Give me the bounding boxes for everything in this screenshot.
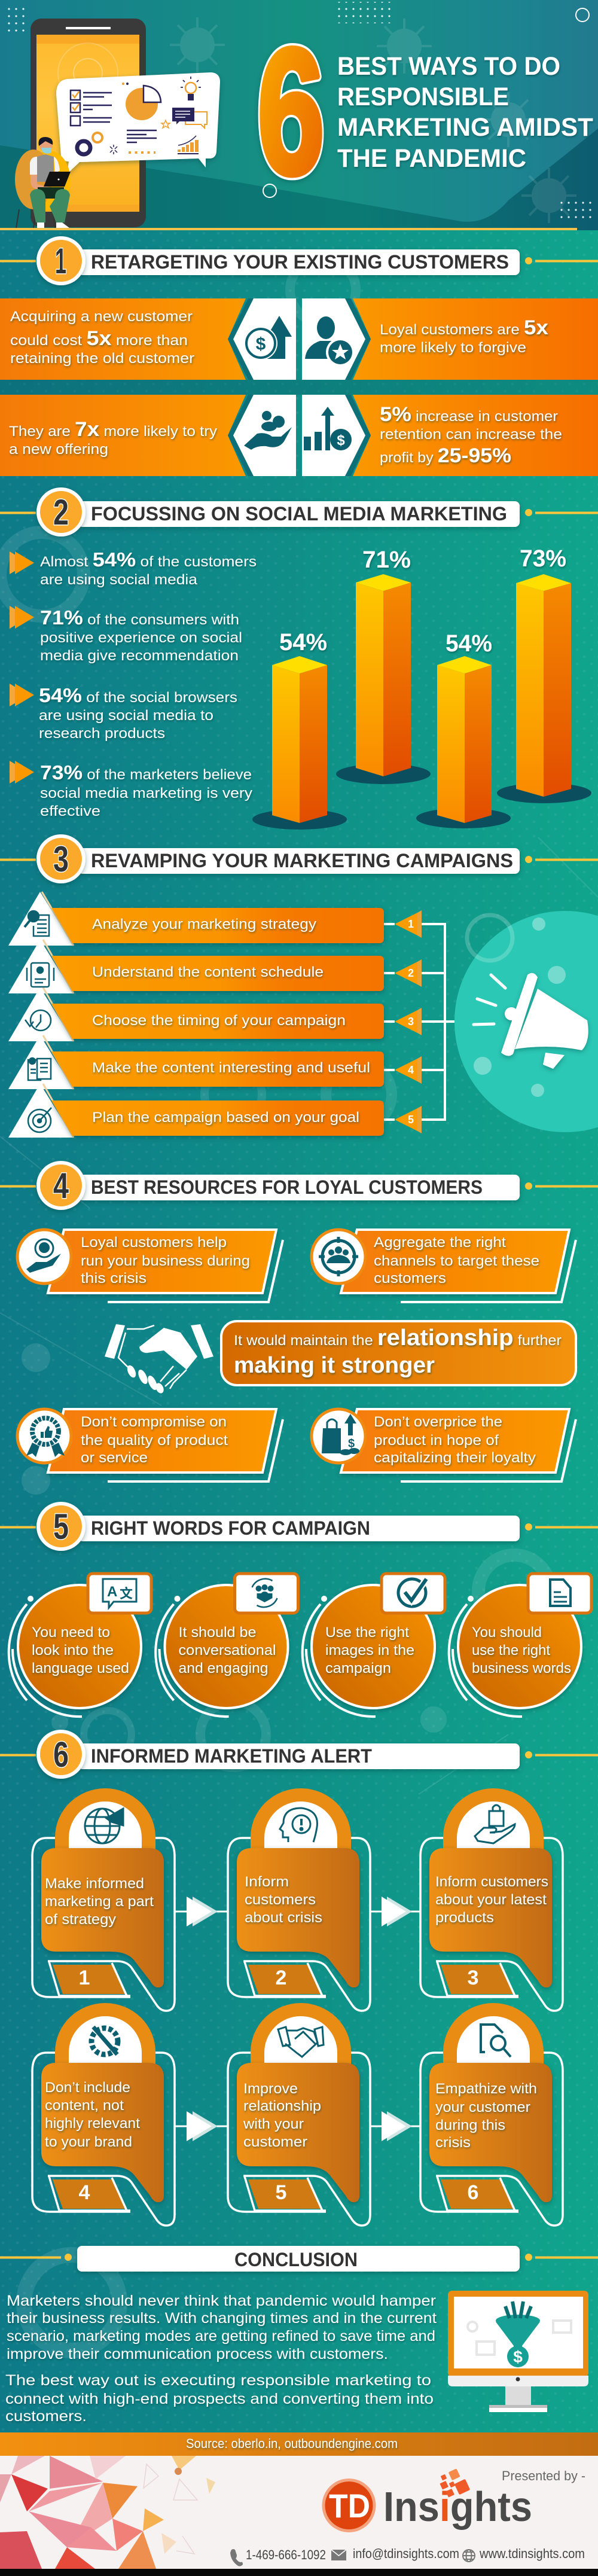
stat list: effective	[40, 803, 100, 819]
title: THE PANDEMIC	[337, 144, 526, 173]
card 5: with your	[243, 2116, 304, 2132]
step triangles	[8, 892, 74, 1138]
circle: images: Use the right	[325, 1624, 409, 1641]
icon: monitor with funnel: $	[513, 2348, 523, 2366]
step labels: Plan the campaign based on your goal	[92, 1109, 359, 1126]
panel text: loyalty statistics: Loyal customers are 5x	[380, 316, 548, 339]
heading 5	[0, 1502, 598, 1551]
contact details: 1-469-666-1092	[246, 2547, 326, 2562]
heading 2: 2	[53, 492, 69, 532]
section 4: loyal customers	[0, 1161, 598, 1481]
heading 3	[0, 834, 598, 883]
big numeral 6	[257, 11, 325, 212]
card 1	[32, 1788, 175, 2011]
panel text: loyalty statistics: could cost 5x more than	[10, 327, 188, 350]
contact details	[230, 2546, 585, 2566]
step labels: Analyze your marketing strategy	[92, 916, 316, 932]
circle: language	[9, 1574, 151, 1717]
numbered arrows: 4	[408, 1064, 414, 1076]
logo: TD Insights: Insights	[383, 2483, 532, 2530]
card: quality	[17, 1409, 283, 1481]
card 5	[228, 2003, 370, 2226]
conclusion text: scenario, marketing modes are getting refined to save time and	[7, 2328, 435, 2345]
contact details: info@tdinsights.com	[353, 2546, 459, 2561]
conclusion text: connect with high-end prospects and converting them into	[5, 2391, 434, 2407]
panel text: loyalty statistics: retaining the old customer	[10, 350, 194, 367]
conclusion heading	[0, 2246, 598, 2272]
conclusion text: Marketers should never think that pandemic would hamper	[7, 2293, 436, 2309]
circle: business words: You should	[472, 1624, 542, 1641]
flow arrows	[175, 1897, 420, 2141]
conclusion text: customers.	[5, 2408, 87, 2425]
panel text: loyalty statistics: retention can increase the	[380, 426, 562, 443]
circle: business words	[449, 1574, 591, 1717]
circle: conversational: conversational	[178, 1642, 276, 1659]
section 3: campaigns	[0, 834, 598, 1138]
title	[337, 52, 593, 173]
card 2	[228, 1788, 370, 2011]
card 6: 6	[468, 2181, 478, 2204]
heading 5: 5	[53, 1507, 69, 1547]
icon: user and star	[305, 316, 355, 367]
card 3: products	[435, 1910, 494, 1926]
heading 4	[0, 1161, 598, 1210]
card 4: 4	[79, 2181, 90, 2204]
heading 2: FOCUSSING ON SOCIAL MEDIA MARKETING	[91, 503, 507, 525]
card: overpricing: capitalizing their loyalty	[374, 1450, 536, 1466]
section 1: retargeting	[0, 236, 598, 476]
stat list	[39, 548, 257, 819]
hex panels	[0, 298, 598, 476]
low-poly decoration	[0, 2456, 215, 2569]
circle: conversational: and engaging	[178, 1660, 268, 1676]
icon: coin and arrow: $	[256, 334, 266, 354]
panel text: loyalty statistics: They are 7x more likely to try	[9, 418, 217, 441]
logo: TD Insights: TD	[329, 2487, 370, 2525]
card: target channels: channels to target these	[374, 1253, 539, 1269]
stat list: media give recommendation	[40, 648, 239, 664]
card 2: customers	[245, 1892, 316, 1908]
circle: images: campaign	[325, 1660, 391, 1676]
stat list: Almost 54% of the customers	[40, 548, 257, 571]
conclusion text: their business results. With changing times and in the current	[7, 2310, 437, 2327]
panel text: loyalty statistics: profit by 25-95%	[380, 444, 511, 467]
heading 4: 4	[53, 1166, 69, 1206]
card 2: 2	[276, 1967, 286, 1989]
heading 4: BEST RESOURCES FOR LOYAL CUSTOMERS	[91, 1176, 483, 1198]
big numeral 6: 6	[257, 11, 325, 212]
card: target channels: customers	[374, 1270, 446, 1287]
card 4: to your brand	[45, 2134, 132, 2150]
circle: conversational	[155, 1574, 298, 1717]
callout: relationship: making it stronger	[234, 1353, 435, 1378]
circle: business words: business words	[472, 1660, 571, 1676]
step labels: Make the content interesting and useful	[92, 1060, 370, 1076]
card 3: about your latest	[435, 1892, 547, 1908]
card 4: content, not	[45, 2098, 124, 2114]
card: overpricing: product in hope of	[374, 1432, 499, 1449]
card 6: during this	[435, 2117, 505, 2133]
bullet arrows	[10, 551, 34, 784]
heading 6: 6	[53, 1734, 69, 1775]
icon: growth bars and dollar: $	[337, 432, 345, 449]
section 5: right words	[0, 1502, 598, 1717]
stat list: are using social media	[40, 572, 198, 588]
card 1: marketing a part	[45, 1894, 154, 1910]
card 6: Empathize with	[435, 2081, 537, 2097]
card 4: Don’t include	[45, 2080, 130, 2096]
card: help business	[17, 1230, 283, 1302]
numbered arrows: 1	[408, 918, 414, 930]
big numeral 6: 6	[257, 11, 325, 212]
circle: language: look into the	[32, 1642, 114, 1659]
circle: language: You need to	[32, 1624, 110, 1641]
stat list: social media marketing is very	[40, 785, 252, 801]
heading 6	[0, 1730, 598, 1779]
card 3: Inform customers	[435, 1874, 548, 1890]
title: RESPONSIBLE	[337, 83, 509, 111]
card 6: your customer	[435, 2099, 530, 2115]
heading 2	[0, 487, 598, 536]
card 1: Make informed	[45, 1876, 144, 1892]
callout: relationship: It would maintain the relationship further	[234, 1325, 562, 1351]
section 2: social media	[0, 487, 598, 830]
card: target channels: Aggregate the right	[374, 1234, 506, 1251]
card 5: relationship	[243, 2098, 321, 2114]
title: MARKETING AMIDST	[337, 113, 593, 142]
source bar	[0, 2432, 598, 2456]
source bar: Source: oberlo.in, outboundengine.com	[186, 2436, 398, 2451]
card 6	[420, 2003, 563, 2226]
panel text: loyalty statistics	[9, 309, 562, 467]
conclusion text: improve their communication process with customers.	[7, 2346, 388, 2362]
heading 3: 3	[53, 839, 69, 879]
megaphone circle	[454, 911, 598, 1132]
illustration: phone with marketer	[15, 19, 220, 228]
icon: handshake	[105, 1324, 213, 1395]
hero banner	[0, 0, 598, 230]
step labels: Understand the content schedule	[92, 964, 324, 980]
numbered arrows	[395, 910, 422, 1133]
icon: coin and arrow	[244, 316, 292, 360]
stat list: 71% of the consumers with	[40, 606, 239, 629]
circle: images	[303, 1574, 445, 1717]
section 6: informed marketing	[0, 1730, 598, 2226]
circle: language: language used	[32, 1660, 129, 1676]
panel text: loyalty statistics: more likely to forgive	[380, 340, 526, 356]
stat list: research products	[39, 725, 165, 742]
chart: isometric bars: 73%	[520, 545, 566, 572]
heading 1: RETARGETING YOUR EXISTING CUSTOMERS	[91, 251, 509, 273]
conclusion text: The best way out is executing responsible marketing to	[5, 2372, 431, 2389]
panel text: loyalty statistics: Acquiring a new customer	[10, 309, 193, 325]
numbered arrows: 5	[408, 1114, 414, 1126]
card 5: 5	[276, 2181, 286, 2204]
card 6: crisis	[435, 2135, 471, 2151]
step labels: Choose the timing of your campaign	[92, 1013, 346, 1029]
card 1: of strategy	[45, 1912, 116, 1928]
card 3	[420, 1788, 563, 2011]
card: overpricing: Don’t overprice the	[374, 1414, 502, 1430]
conclusion	[0, 2246, 598, 2456]
heading 6: INFORMED MARKETING ALERT	[91, 1745, 372, 1767]
heading 3: REVAMPING YOUR MARKETING CAMPAIGNS	[91, 850, 513, 871]
stat list: positive experience on social	[40, 630, 242, 646]
stat list: are using social media to	[39, 708, 213, 724]
panel text: loyalty statistics: a new offering	[9, 441, 108, 458]
heading 1: 1	[55, 241, 66, 281]
contact details: www.tdinsights.com	[479, 2546, 585, 2561]
card: target channels	[312, 1230, 576, 1302]
icon: monitor with funnel	[448, 2291, 588, 2412]
step icons	[25, 911, 54, 1132]
panel text: loyalty statistics: 5% increase in customer	[380, 403, 558, 426]
card 2: Inform	[245, 1874, 289, 1890]
card: overpricing: $	[348, 1437, 355, 1450]
card: help business: this crisis	[81, 1270, 147, 1287]
step labels	[92, 916, 370, 1126]
heading 1	[0, 236, 598, 285]
footer	[0, 2456, 598, 2576]
callout: relationship	[221, 1321, 576, 1385]
card 5: Improve	[243, 2081, 298, 2097]
icon: growth bars and dollar	[304, 407, 352, 450]
card 4	[32, 2003, 175, 2226]
conclusion heading: CONCLUSION	[234, 2249, 358, 2270]
card 3: 3	[468, 1967, 478, 1989]
numbered arrows: 3	[408, 1016, 414, 1028]
numbered arrows: 2	[408, 967, 414, 979]
card 1: 1	[79, 1967, 90, 1989]
card: quality: or service	[81, 1450, 148, 1466]
card: help business: Loyal customers help	[81, 1234, 227, 1251]
chart: isometric bars: 71%	[362, 547, 411, 573]
stat list: 73% of the marketers believe	[40, 761, 252, 784]
title: BEST WAYS TO DO	[337, 52, 560, 81]
card 5: customer	[243, 2134, 307, 2150]
presented by: Presented by -	[502, 2468, 585, 2483]
chart: isometric bars: 54%	[446, 630, 492, 657]
stat list: 54% of the social browsers	[39, 684, 237, 706]
chart: isometric bars	[252, 545, 591, 830]
logo: TD Insights	[322, 2468, 532, 2532]
conclusion text	[5, 2293, 437, 2425]
circle: conversational: It should be	[178, 1624, 256, 1641]
circle: images: images in the	[325, 1642, 414, 1659]
card: quality: Don’t compromise on	[81, 1414, 227, 1430]
icon: hand and people	[244, 411, 292, 450]
card: help business: run your business during	[81, 1253, 250, 1269]
heading 5: RIGHT WORDS FOR CAMPAIGN	[91, 1517, 370, 1539]
circle: language: 文	[120, 1586, 133, 1601]
connector lines	[384, 924, 454, 1120]
card: quality: the quality of product	[81, 1432, 228, 1449]
circle: business words: use the right	[472, 1642, 550, 1659]
card 4: highly relevant	[45, 2115, 140, 2132]
circle: language: A	[107, 1584, 117, 1600]
step bars	[51, 908, 384, 1136]
chart: isometric bars: 54%	[279, 629, 327, 656]
card: overpricing	[312, 1409, 576, 1481]
card 2: about crisis	[245, 1910, 322, 1926]
